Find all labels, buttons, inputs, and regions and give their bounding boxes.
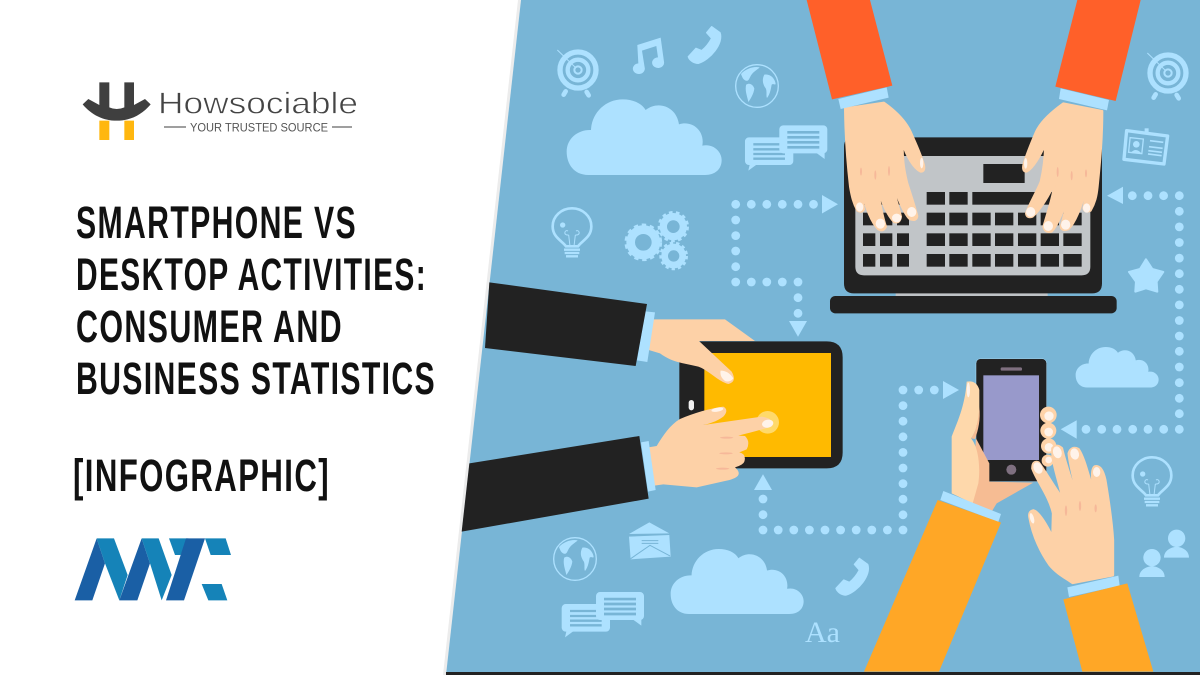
icon: id card (1124, 128, 1168, 164)
title: [INFOGRAPHIC] (73, 450, 330, 501)
icon: bulb left (553, 208, 591, 256)
left hand and orange sleeve (807, 0, 924, 230)
icon: bulb right (1133, 457, 1171, 505)
icon: phone handset bottom (836, 558, 868, 595)
icon: large cloud (567, 99, 722, 175)
dotted arrow: top left to laptop (731, 195, 838, 337)
right hand and orange sleeve (1023, 0, 1141, 232)
bottom hand and black sleeve (462, 407, 774, 532)
icon: envelope (629, 522, 671, 559)
title: SMARTPHONE VS (76, 197, 357, 248)
icon: chat bubbles top (745, 125, 827, 171)
icon: globe top (736, 65, 778, 107)
dotted arrow: phone to tablet (754, 381, 959, 534)
touch glow (756, 411, 779, 434)
icon: gears (626, 212, 688, 269)
background icons (553, 27, 1189, 649)
icon: Aa letters: Aa (805, 616, 840, 649)
icon: star (1129, 259, 1163, 292)
icon: chat bubbles bottom (562, 592, 644, 637)
top hand and black sleeve (485, 282, 755, 384)
laptop (830, 137, 1117, 313)
title: BUSINESS STATISTICS (76, 353, 436, 404)
left hand and orange sleeve (864, 381, 1057, 672)
icon: target left (557, 50, 596, 95)
laptop with typing hands (807, 0, 1141, 313)
title: CONSUMER AND (76, 301, 343, 352)
tablet (679, 341, 843, 468)
logo: Howsociable: YOUR TRUSTED SOURCE (190, 120, 328, 134)
icon: globe bottom (554, 538, 596, 580)
icon: phone handset top (688, 27, 721, 63)
icon: right cloud (1076, 347, 1159, 388)
tablet with hands (462, 282, 843, 532)
panel: blue illustration background (444, 0, 1200, 675)
smartphone (976, 359, 1047, 482)
smartphone with hands (864, 359, 1153, 672)
logo: Howsociable (83, 82, 358, 140)
title: DESKTOP ACTIVITIES: (76, 249, 427, 300)
dotted arrow: right side (1061, 187, 1184, 439)
right hand and orange sleeve (1029, 445, 1153, 672)
icon: people (1139, 530, 1189, 577)
title (73, 197, 436, 501)
icon: music note (633, 38, 664, 74)
icon: bottom cloud (671, 549, 804, 614)
icon: target right (1147, 53, 1186, 98)
logo: Howsociable: Howsociable (158, 86, 358, 120)
logo: MTC (75, 538, 231, 600)
